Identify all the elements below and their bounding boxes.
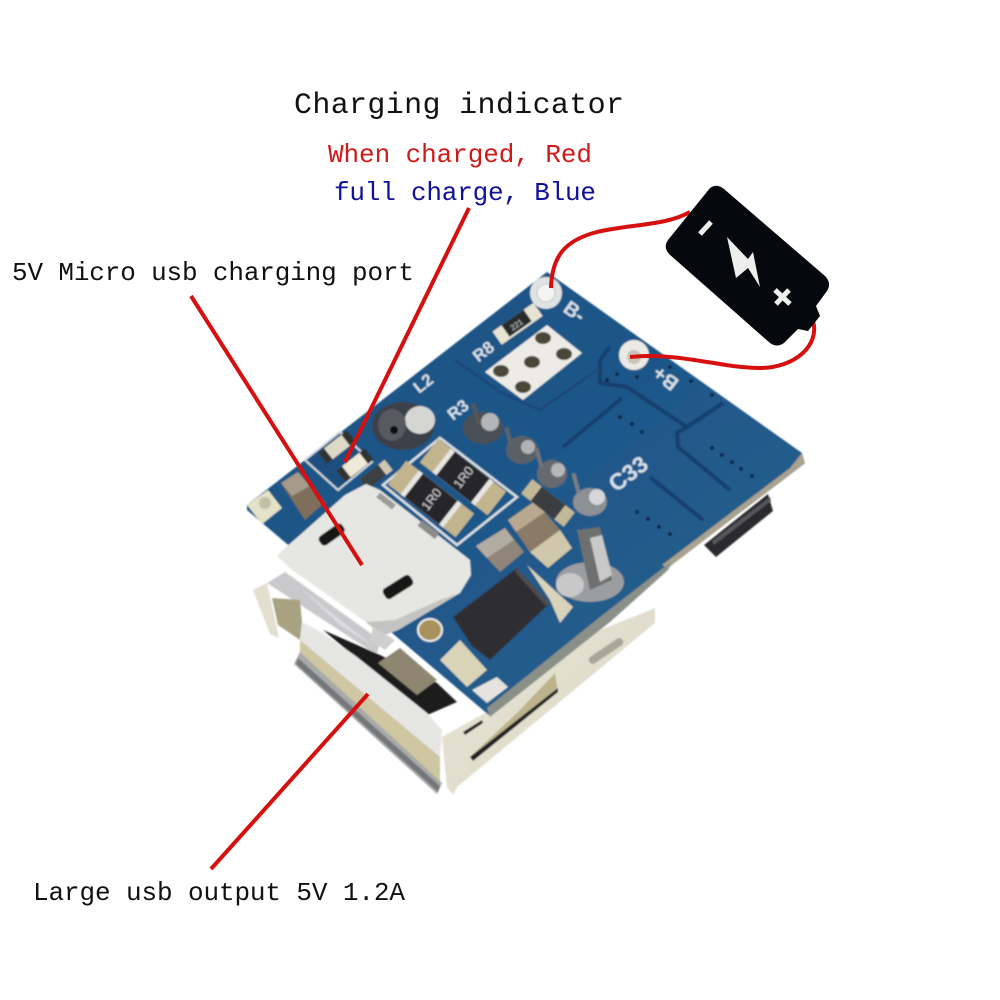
silkscreen labels: B+ (649, 361, 683, 394)
resistor pads outline (383, 438, 517, 545)
silkscreen labels: B- (559, 297, 589, 327)
slide switch on rear edge (704, 494, 773, 557)
label: micro USB charging port: 5V Micro usb charging port (12, 258, 414, 288)
capacitor pair (476, 501, 572, 572)
small resistor by micro USB (359, 460, 393, 490)
LED indicators (305, 430, 373, 490)
resistor 221: 221 (509, 317, 525, 333)
lower metal lip (294, 652, 442, 794)
1R0 resistor right (420, 439, 506, 515)
text: when charged red: When charged, Red (328, 140, 592, 170)
module photo: charging board with USB connectors (247, 272, 805, 795)
programming pad with holes (485, 325, 582, 400)
interior left (272, 598, 302, 640)
icon: lightning bolt (727, 237, 760, 287)
shell side panel (442, 608, 655, 795)
power diode solder blob (556, 527, 624, 602)
large solder blob (372, 402, 435, 450)
wire: battery negative to B- (551, 212, 690, 288)
wire: battery positive to B+ (630, 321, 814, 368)
left pad and capacitor (247, 472, 325, 524)
black switching IC (453, 565, 573, 660)
label: large USB output: Large usb output 5V 1.2A (33, 878, 405, 908)
lower cream band (300, 640, 440, 785)
1R0 resistor left (388, 461, 474, 537)
silkscreen labels: L2 (410, 370, 437, 397)
solder joints (463, 403, 607, 516)
silkscreen labels: C33 (604, 451, 653, 497)
micro USB connector (277, 484, 471, 650)
callout line: charging indicator (345, 208, 469, 462)
copper traces (455, 347, 730, 520)
top rail (267, 572, 380, 655)
text: full charge blue: full charge, Blue (334, 178, 596, 208)
callout line: micro USB port (191, 296, 362, 565)
1R0 resistor right: 1R0 (450, 463, 477, 491)
callout line: large USB output (211, 694, 368, 869)
icon: minus sign (700, 222, 711, 234)
small solder pads (418, 619, 508, 703)
tan contact piece (378, 648, 437, 695)
icon: plus sign (775, 290, 790, 304)
silkscreen labels: R3 (444, 396, 473, 424)
PCB board (247, 272, 805, 717)
via dots (605, 365, 754, 536)
resistor 221 (493, 303, 543, 345)
silkscreen labels: R8 (469, 337, 498, 366)
connector tongue (300, 622, 442, 757)
dark interior (323, 630, 457, 716)
pad B- (530, 277, 562, 309)
board edge (662, 453, 805, 568)
silkscreen labels (410, 297, 683, 497)
pad B+ (619, 340, 649, 370)
icon: battery (666, 186, 829, 346)
USB-A metal shell (253, 572, 655, 795)
1R0 resistor left: 1R0 (418, 485, 445, 513)
left flap (253, 583, 279, 638)
small 100 resistor (521, 479, 575, 527)
title: charging indicator: Charging indicator (294, 89, 624, 123)
